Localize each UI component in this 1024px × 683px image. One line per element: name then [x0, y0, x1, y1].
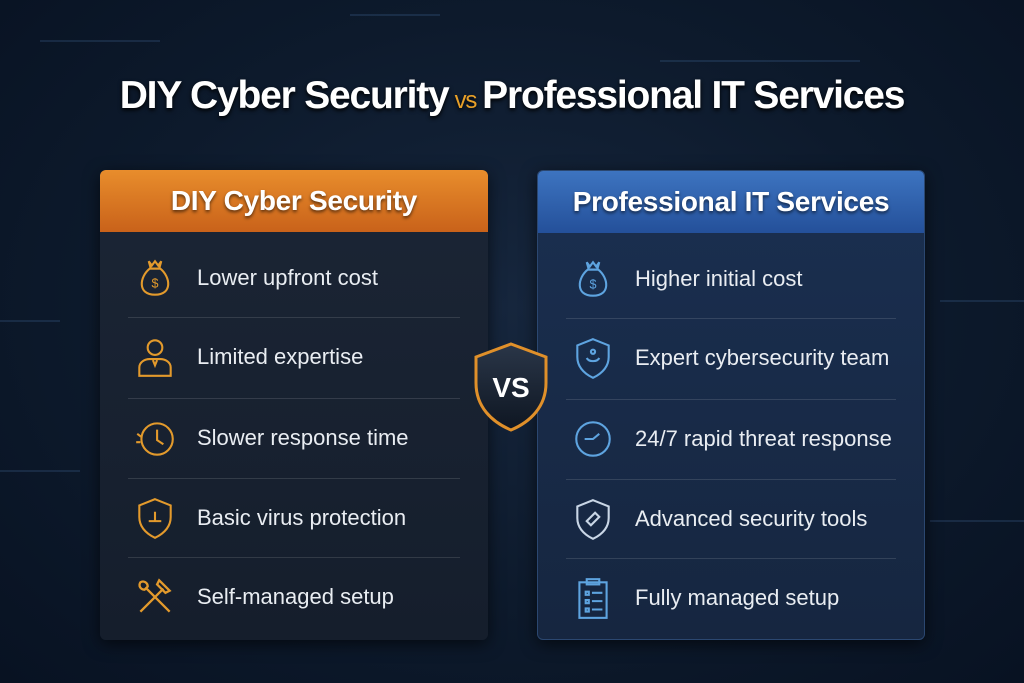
row: lower cost: Lower upfront cost: [197, 265, 378, 290]
row: tools: [576, 499, 867, 540]
panel: DIY: [100, 170, 488, 640]
row: virus: [138, 498, 406, 539]
row: lower cost: $: [152, 276, 159, 290]
row: cost: Higher initial cost: [635, 266, 803, 291]
row: fully managed: [578, 578, 839, 619]
row: self managed: Self-managed setup: [197, 584, 394, 609]
row: fully managed: Fully managed setup: [635, 585, 839, 610]
row: cost: $: [590, 277, 597, 291]
row: 24/7: [575, 421, 892, 457]
header: professional: Professional IT Services: [573, 186, 889, 217]
header: DIY: DIY Cyber Security: [171, 185, 417, 216]
row: lower cost: [140, 260, 378, 296]
icon: VS shield: VS: [492, 372, 530, 403]
row: expert team: [576, 338, 889, 379]
panel: professional: [537, 170, 925, 640]
row: expert team: Expert cybersecurity team: [635, 345, 889, 370]
header: DIY: [100, 170, 488, 232]
row: 24/7: 24/7 rapid threat response: [635, 426, 892, 451]
title: DIY Cyber SecurityvsProfessional IT Services: [120, 74, 904, 117]
row: response: Slower response time: [197, 425, 409, 450]
row: self managed: [138, 578, 394, 612]
row: virus: Basic virus protection: [197, 505, 406, 530]
row: tools: Advanced security tools: [635, 506, 867, 531]
row: expertise: Limited expertise: [197, 344, 363, 369]
row: cost: [578, 260, 803, 297]
icon: VS shield: [474, 342, 548, 432]
row: expertise: [138, 339, 363, 377]
header: professional: [538, 171, 924, 233]
row: response: [136, 422, 409, 456]
